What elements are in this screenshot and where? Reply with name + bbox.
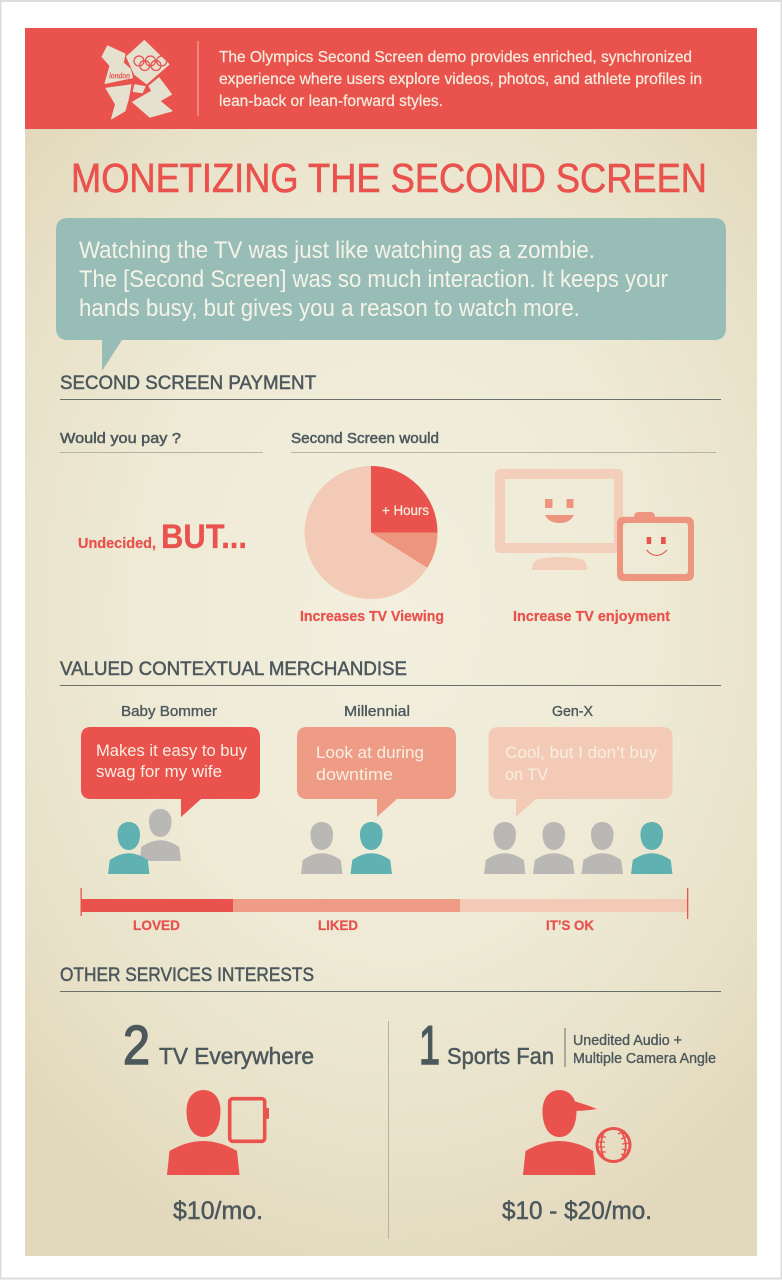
service: sports fan: Multiple Camera Angle [573, 1051, 716, 1067]
icon: smiling TV and tablet [495, 469, 694, 581]
quote bubble: Watching the TV was just like watching as a zombie. [79, 237, 595, 264]
header description: lean-back or lean-forward styles. [219, 93, 443, 110]
scale bar: loved, liked, it's ok: LOVED [133, 917, 180, 933]
callout: undecided but: Undecided, [78, 535, 156, 552]
column: gen-x: Gen-X [552, 704, 593, 720]
service: sports fan [419, 1014, 716, 1225]
section: second screen payment [60, 372, 721, 625]
column: millennial: Millennial [344, 704, 410, 720]
column: gen-x: Cool, but I don’t buy [505, 743, 657, 762]
title: MONETIZING THE SECOND SCREEN [71, 155, 707, 201]
service: sports fan: $10 - $20/mo. [502, 1197, 652, 1225]
pie chart: increases TV viewing: + Hours [382, 503, 429, 518]
icon: person with cap and baseball [523, 1090, 630, 1175]
subheading: would you pay: Would you pay ? [60, 430, 181, 447]
service: sports fan: Sports Fan [447, 1043, 554, 1069]
column: millennial: Look at during [316, 743, 424, 762]
pie chart: increases TV viewing [304, 466, 438, 599]
column: millennial: downtime [316, 765, 393, 784]
column: baby boomer: swag for my wife [96, 762, 222, 781]
header description: experience where users explore videos, photos, and athlete profiles in [219, 71, 702, 88]
quote bubble: hands busy, but gives you a reason to watch more. [79, 295, 580, 322]
heading: other services interests: OTHER SERVICES INTERESTS [60, 964, 314, 986]
label: increase TV enjoyment: Increase TV enjoyment [513, 608, 670, 625]
service: sports fan: 1 [419, 1014, 440, 1076]
subheading: second screen would: Second Screen would [291, 430, 439, 447]
quote bubble [56, 218, 726, 371]
column divider [388, 1021, 389, 1239]
header banner [25, 28, 757, 129]
scale bar: loved, liked, it's ok: IT’S OK [546, 917, 594, 933]
callout: undecided but: BUT... [161, 518, 247, 556]
heading: valued contextual merchandise: VALUED CONTEXTUAL MERCHANDISE [60, 658, 407, 680]
header divider [198, 41, 199, 116]
header description [219, 49, 702, 110]
icon: London 2012 logo: london [109, 70, 130, 80]
service: sports fan: Unedited Audio + [573, 1033, 682, 1049]
callout: undecided but [78, 518, 247, 556]
service: TV everywhere: TV Everywhere [159, 1043, 314, 1069]
scale bar: loved, liked, it's ok [80, 888, 688, 933]
section: valued contextual merchandise [60, 658, 721, 933]
label: increases TV viewing: Increases TV Viewing [300, 608, 444, 625]
heading: second screen payment: SECOND SCREEN PAYMENT [60, 372, 316, 394]
section: other services interests [60, 964, 721, 1239]
header description: The Olympics Second Screen demo provides enriched, synchronized [219, 49, 692, 66]
quote bubble: The [Second Screen] was so much interaction. It keeps your [79, 266, 668, 293]
scale bar: loved, liked, it's ok: LIKED [318, 917, 358, 933]
column: baby boomer [81, 704, 260, 874]
column: millennial [297, 704, 456, 874]
icon: London 2012 logo [102, 40, 172, 119]
column: baby boomer: Baby Bommer [121, 704, 217, 720]
column: gen-x [484, 704, 672, 874]
icon: person with tablet [167, 1090, 269, 1175]
column: baby boomer: Makes it easy to buy [96, 741, 247, 760]
service: TV everywhere [123, 1014, 314, 1225]
column: gen-x: on TV [505, 765, 549, 784]
service: TV everywhere: $10/mo. [173, 1197, 263, 1225]
service: TV everywhere: 2 [123, 1014, 150, 1076]
